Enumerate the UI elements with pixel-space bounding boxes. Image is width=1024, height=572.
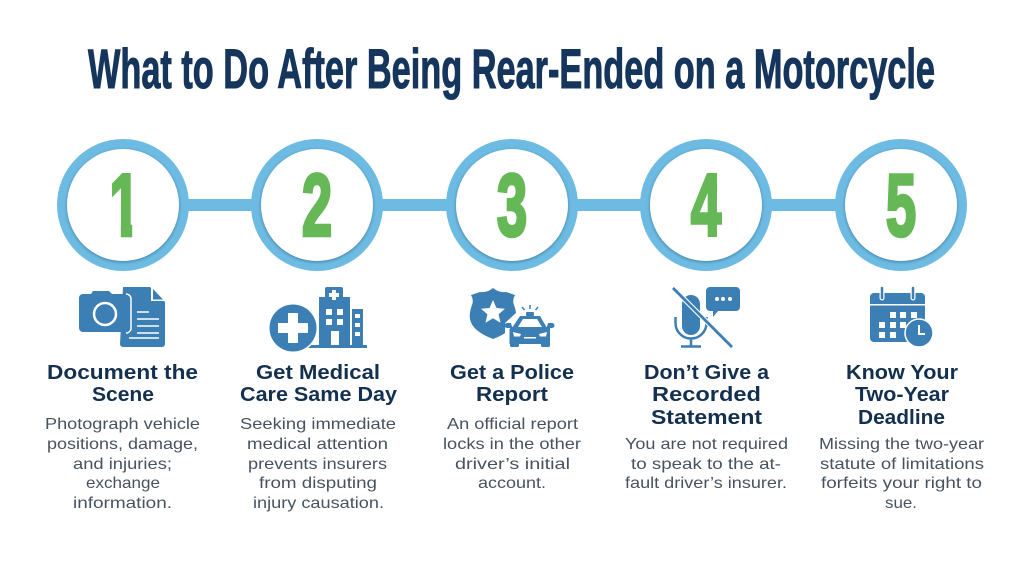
heading: Deadline [858,407,945,429]
number circle 4 [640,139,772,271]
description: statute of limitations [820,456,984,473]
heading [644,362,770,429]
heading: Get Medical [256,362,380,384]
description [240,416,396,512]
description: positions, damage, [47,436,198,453]
heading: Report [476,384,548,406]
number circle 3 [446,139,578,271]
number circle 5 [835,139,967,271]
description: prevents insurers [248,456,387,473]
heading: Scene [92,384,154,406]
heading: Don’t Give a [644,362,770,384]
number circle 2 [251,139,383,271]
heading: Care Same Day [240,384,398,406]
description: information. [73,495,172,512]
description: forfeits your right to [821,475,982,492]
number circle 3: 3 [497,156,527,255]
heading [846,362,958,429]
description: exchange [86,475,160,492]
heading: Know Your [846,362,958,384]
icon: muted microphone and speech bubble [673,287,740,347]
heading [450,362,574,406]
description: account. [478,475,546,492]
description: to speak to the at- [631,456,781,473]
description: An official report [447,416,579,433]
description: injury causation. [253,495,384,512]
step 5 [819,139,985,512]
icon: calendar with clock [870,288,933,347]
step 3 [443,139,582,492]
description: You are not required [625,436,788,453]
heading [240,362,398,406]
step 2 [240,139,398,512]
step 1 [45,139,200,512]
heading [47,362,198,406]
number circle 5: 5 [886,156,916,255]
description: sue. [885,495,917,512]
description: and injuries; [73,456,172,473]
icon: camera and document [79,287,165,347]
number circle 1 [57,139,189,271]
number circle 1: 1 [109,156,140,255]
description: driver’s initial [455,456,570,473]
description: medical attention [247,436,388,453]
icon: medical cross and hospital [268,287,367,353]
heading: Two-Year [855,384,949,406]
connector line [123,199,901,211]
description [45,416,200,512]
icon: police badge and car [470,288,555,349]
heading: Recorded [652,384,761,406]
step 4 [625,139,788,492]
number circle 2: 2 [302,156,332,255]
heading: Get a Police [450,362,574,384]
description: Photograph vehicle [45,416,200,433]
description: fault driver’s insurer. [625,475,787,492]
description: Missing the two-year [819,436,985,453]
heading: Document the [47,362,198,384]
description: Seeking immediate [240,416,396,433]
description [819,436,985,512]
description: locks in the other [443,436,582,453]
description [443,416,582,492]
description: from disputing [259,475,377,492]
description [625,436,788,492]
heading: Statement [651,407,762,429]
number circle 4: 4 [691,156,721,255]
